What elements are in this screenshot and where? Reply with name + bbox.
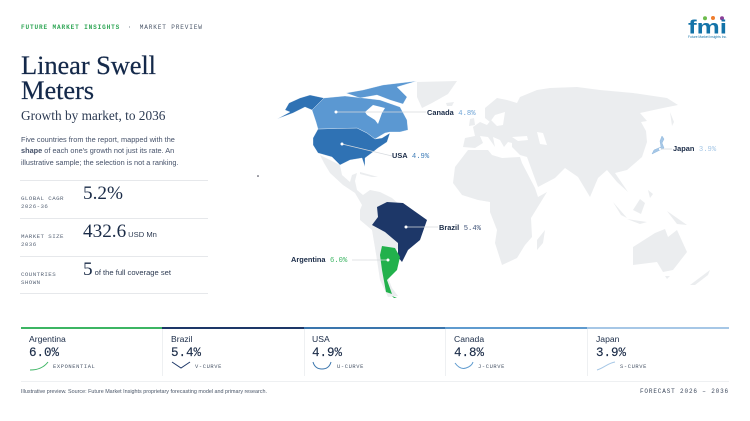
map label: Brazil: Brazil 5.4% xyxy=(439,222,481,232)
map label: Japan: Japan 3.9% xyxy=(673,144,716,154)
card: Argentina: Argentina xyxy=(29,334,66,344)
card: Argentina: 6.0% xyxy=(29,346,59,360)
Japan xyxy=(652,136,664,154)
Hudson Bay xyxy=(365,105,385,124)
Hawaii speck xyxy=(257,175,259,177)
title: Linear Swell xyxy=(21,50,156,80)
card: USA: USA xyxy=(312,334,330,344)
stat: market size: 2036 xyxy=(21,241,37,248)
curve: U xyxy=(312,362,332,370)
curve: J xyxy=(454,362,474,369)
stat: market size: MARKET SIZE xyxy=(21,233,64,240)
gray land xyxy=(320,81,710,297)
stat: countries shown: 5 of the full coverage set xyxy=(83,259,171,280)
logo xyxy=(688,16,727,39)
white seas xyxy=(512,132,547,145)
stat: global CAGR: GLOBAL CAGR xyxy=(21,195,64,202)
stat: market size xyxy=(21,221,157,248)
card: Brazil: V-CURVE xyxy=(195,364,222,370)
intro text xyxy=(21,134,179,166)
Argentina xyxy=(380,246,400,298)
curve: S xyxy=(596,362,615,370)
card: Brazil xyxy=(171,334,222,370)
card: Canada: J-CURVE xyxy=(478,364,505,370)
card: Japan xyxy=(596,334,647,370)
title xyxy=(21,50,156,104)
card: USA xyxy=(312,334,364,370)
title: Meters xyxy=(21,74,94,104)
card: Argentina xyxy=(29,334,95,370)
logo: fmi xyxy=(688,18,727,38)
intro text: shape of each one's growth not just its rate. An xyxy=(21,146,174,155)
USA xyxy=(277,95,390,167)
leader lines xyxy=(336,112,672,260)
card: Argentina: EXPONENTIAL xyxy=(53,364,95,370)
card: USA: 4.9% xyxy=(312,346,342,360)
Brazil xyxy=(372,202,427,262)
stat: countries shown: COUNTRIES xyxy=(21,271,56,278)
map label: Argentina: Argentina 6.0% xyxy=(291,255,347,265)
card: Japan: 3.9% xyxy=(596,346,626,360)
curve: exponential xyxy=(30,362,48,370)
logo: Future Market Insights Inc. xyxy=(688,35,727,39)
stat: market size: 432.6 USD Mn xyxy=(83,221,157,242)
card: Japan: S-CURVE xyxy=(620,364,647,370)
card: Japan: Japan xyxy=(596,334,619,344)
map label: Canada: Canada 4.8% xyxy=(427,108,476,118)
curve: V xyxy=(172,362,190,369)
stat: countries shown xyxy=(21,259,171,286)
card: USA: U-CURVE xyxy=(337,364,364,370)
eyebrow: FUTURE MARKET INSIGHTS · MARKET PREVIEW xyxy=(21,24,203,31)
Canada xyxy=(312,81,417,139)
source note: Illustrative preview. Source: Future Market Insights proprietary forecasting model and primary research. xyxy=(21,389,267,395)
stat: global CAGR xyxy=(21,183,123,210)
stat: global CAGR: 5.2% xyxy=(83,183,123,204)
card: Canada: Canada xyxy=(454,334,484,344)
intro text: Five countries from the report, mapped with the xyxy=(21,134,175,144)
stat: global CAGR: 2026-36 xyxy=(21,203,48,210)
forecast label: FORECAST 2026 – 2036 xyxy=(640,388,729,395)
card: Canada xyxy=(454,334,505,370)
card: Brazil: 5.4% xyxy=(171,346,201,360)
intro text: illustrative sample; the selection is not a ranking. xyxy=(21,158,179,166)
stat: countries shown: SHOWN xyxy=(21,279,40,286)
subtitle: Growth by market, to 2036 xyxy=(21,108,165,123)
card: Brazil: Brazil xyxy=(171,334,192,344)
map label: USA: USA 4.9% xyxy=(392,151,429,161)
card: Canada: 4.8% xyxy=(454,346,484,360)
